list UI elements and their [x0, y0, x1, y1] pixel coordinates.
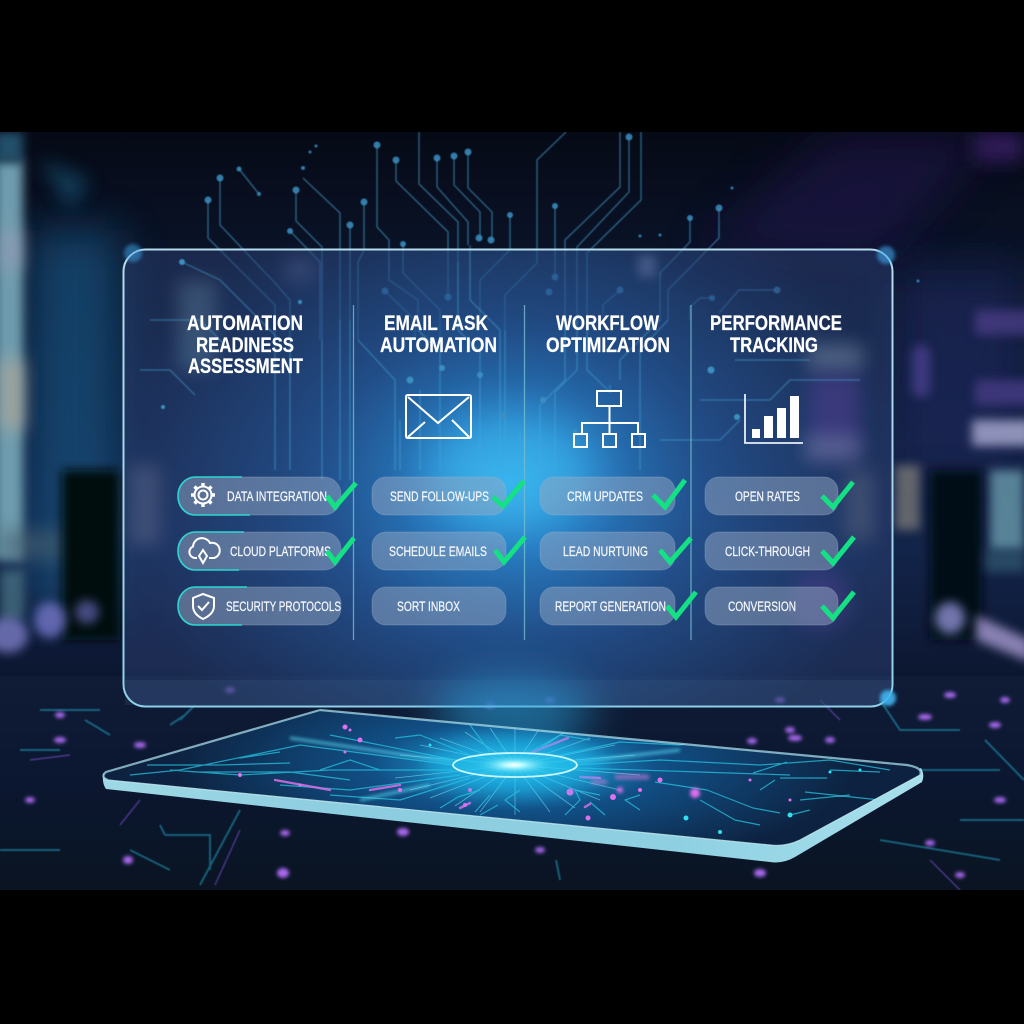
- panel border: [124, 250, 892, 706]
- blurred office background: [0, 132, 1024, 890]
- heading: performance tracking: [711, 315, 842, 352]
- pill: lead nurtuing: LEAD NURTUING: [563, 544, 648, 559]
- pill: send follow-ups: SEND FOLLOW-UPS: [390, 489, 489, 504]
- pill: click-through: [705, 532, 854, 570]
- heading: email task automation: AUTOMATION: [380, 334, 497, 357]
- heading: automation readiness assessment: ASSESSMENT: [188, 355, 303, 378]
- pill: report generation: [540, 587, 696, 625]
- icon: org chart: [574, 391, 645, 447]
- pill: send follow-ups: [372, 477, 524, 515]
- icon: cloud: [189, 538, 220, 563]
- heading: performance tracking: PERFORMANCE: [710, 312, 842, 335]
- pill: conversion: [705, 587, 854, 625]
- pill: cloud platforms: [178, 532, 354, 570]
- background circuit traces above panel: [204, 132, 920, 350]
- heading: workflow optimization: OPTIMIZATION: [546, 334, 670, 357]
- panel circuit traces: [140, 245, 860, 480]
- corner glows: [124, 244, 896, 706]
- pill: schedule emails: SCHEDULE EMAILS: [389, 544, 487, 559]
- pill: conversion: CONVERSION: [728, 599, 796, 614]
- heading: automation readiness assessment: AUTOMATION: [187, 312, 303, 335]
- icon: shield: [193, 594, 214, 619]
- column 2: email task automation: [372, 312, 525, 625]
- floor circuit traces: [0, 687, 1024, 890]
- heading: email task automation: EMAIL TASK: [384, 312, 488, 335]
- tablet side edge: [103, 768, 923, 862]
- panel: glass dashboard: [123, 244, 896, 707]
- icon: envelope: [406, 395, 471, 438]
- pill: schedule emails: [372, 532, 525, 570]
- tablet side highlight: [108, 775, 920, 845]
- pill: open rates: OPEN RATES: [735, 489, 800, 504]
- pill: crm updates: CRM UPDATES: [567, 489, 643, 504]
- pill: sort inbox: [372, 587, 506, 625]
- tablet top surface: [104, 724, 921, 838]
- heading: automation readiness assessment: [187, 315, 303, 374]
- heading: workflow optimization: [546, 315, 669, 352]
- pill: crm updates: [540, 477, 685, 515]
- icon: gear: [191, 483, 215, 507]
- heading: performance tracking: TRACKING: [730, 334, 818, 357]
- pill: sort inbox: SORT INBOX: [397, 599, 460, 614]
- heading: email task automation: [380, 315, 496, 352]
- pill: security protocols: SECURITY PROTOCOLS: [226, 599, 341, 614]
- pill: open rates: [705, 477, 853, 515]
- pill: data integration: [178, 477, 356, 515]
- tablet top edge highlight: [103, 710, 921, 780]
- pill: click-through: CLICK-THROUGH: [725, 544, 810, 559]
- pill: cloud platforms: CLOUD PLATFORMS: [230, 544, 331, 559]
- icon: bar chart: [745, 394, 803, 443]
- column dividers: [354, 305, 691, 640]
- tablet glowing core: [425, 737, 605, 793]
- heading: automation readiness assessment: READINESS: [196, 334, 294, 357]
- pill: data integration: DATA INTEGRATION: [227, 489, 327, 504]
- pill: lead nurtuing: [540, 532, 691, 570]
- glass tablet base: [100, 678, 930, 865]
- pill: security protocols: [178, 587, 341, 625]
- column 3: workflow optimization: [540, 312, 696, 625]
- heading: workflow optimization: WORKFLOW: [556, 312, 659, 335]
- tablet circuit surface: [104, 711, 921, 840]
- panel background reflections: [125, 255, 891, 705]
- column 1: automation readiness assessment: [178, 312, 356, 625]
- pill: report generation: REPORT GENERATION: [555, 599, 666, 614]
- column 4: performance tracking: [705, 312, 854, 625]
